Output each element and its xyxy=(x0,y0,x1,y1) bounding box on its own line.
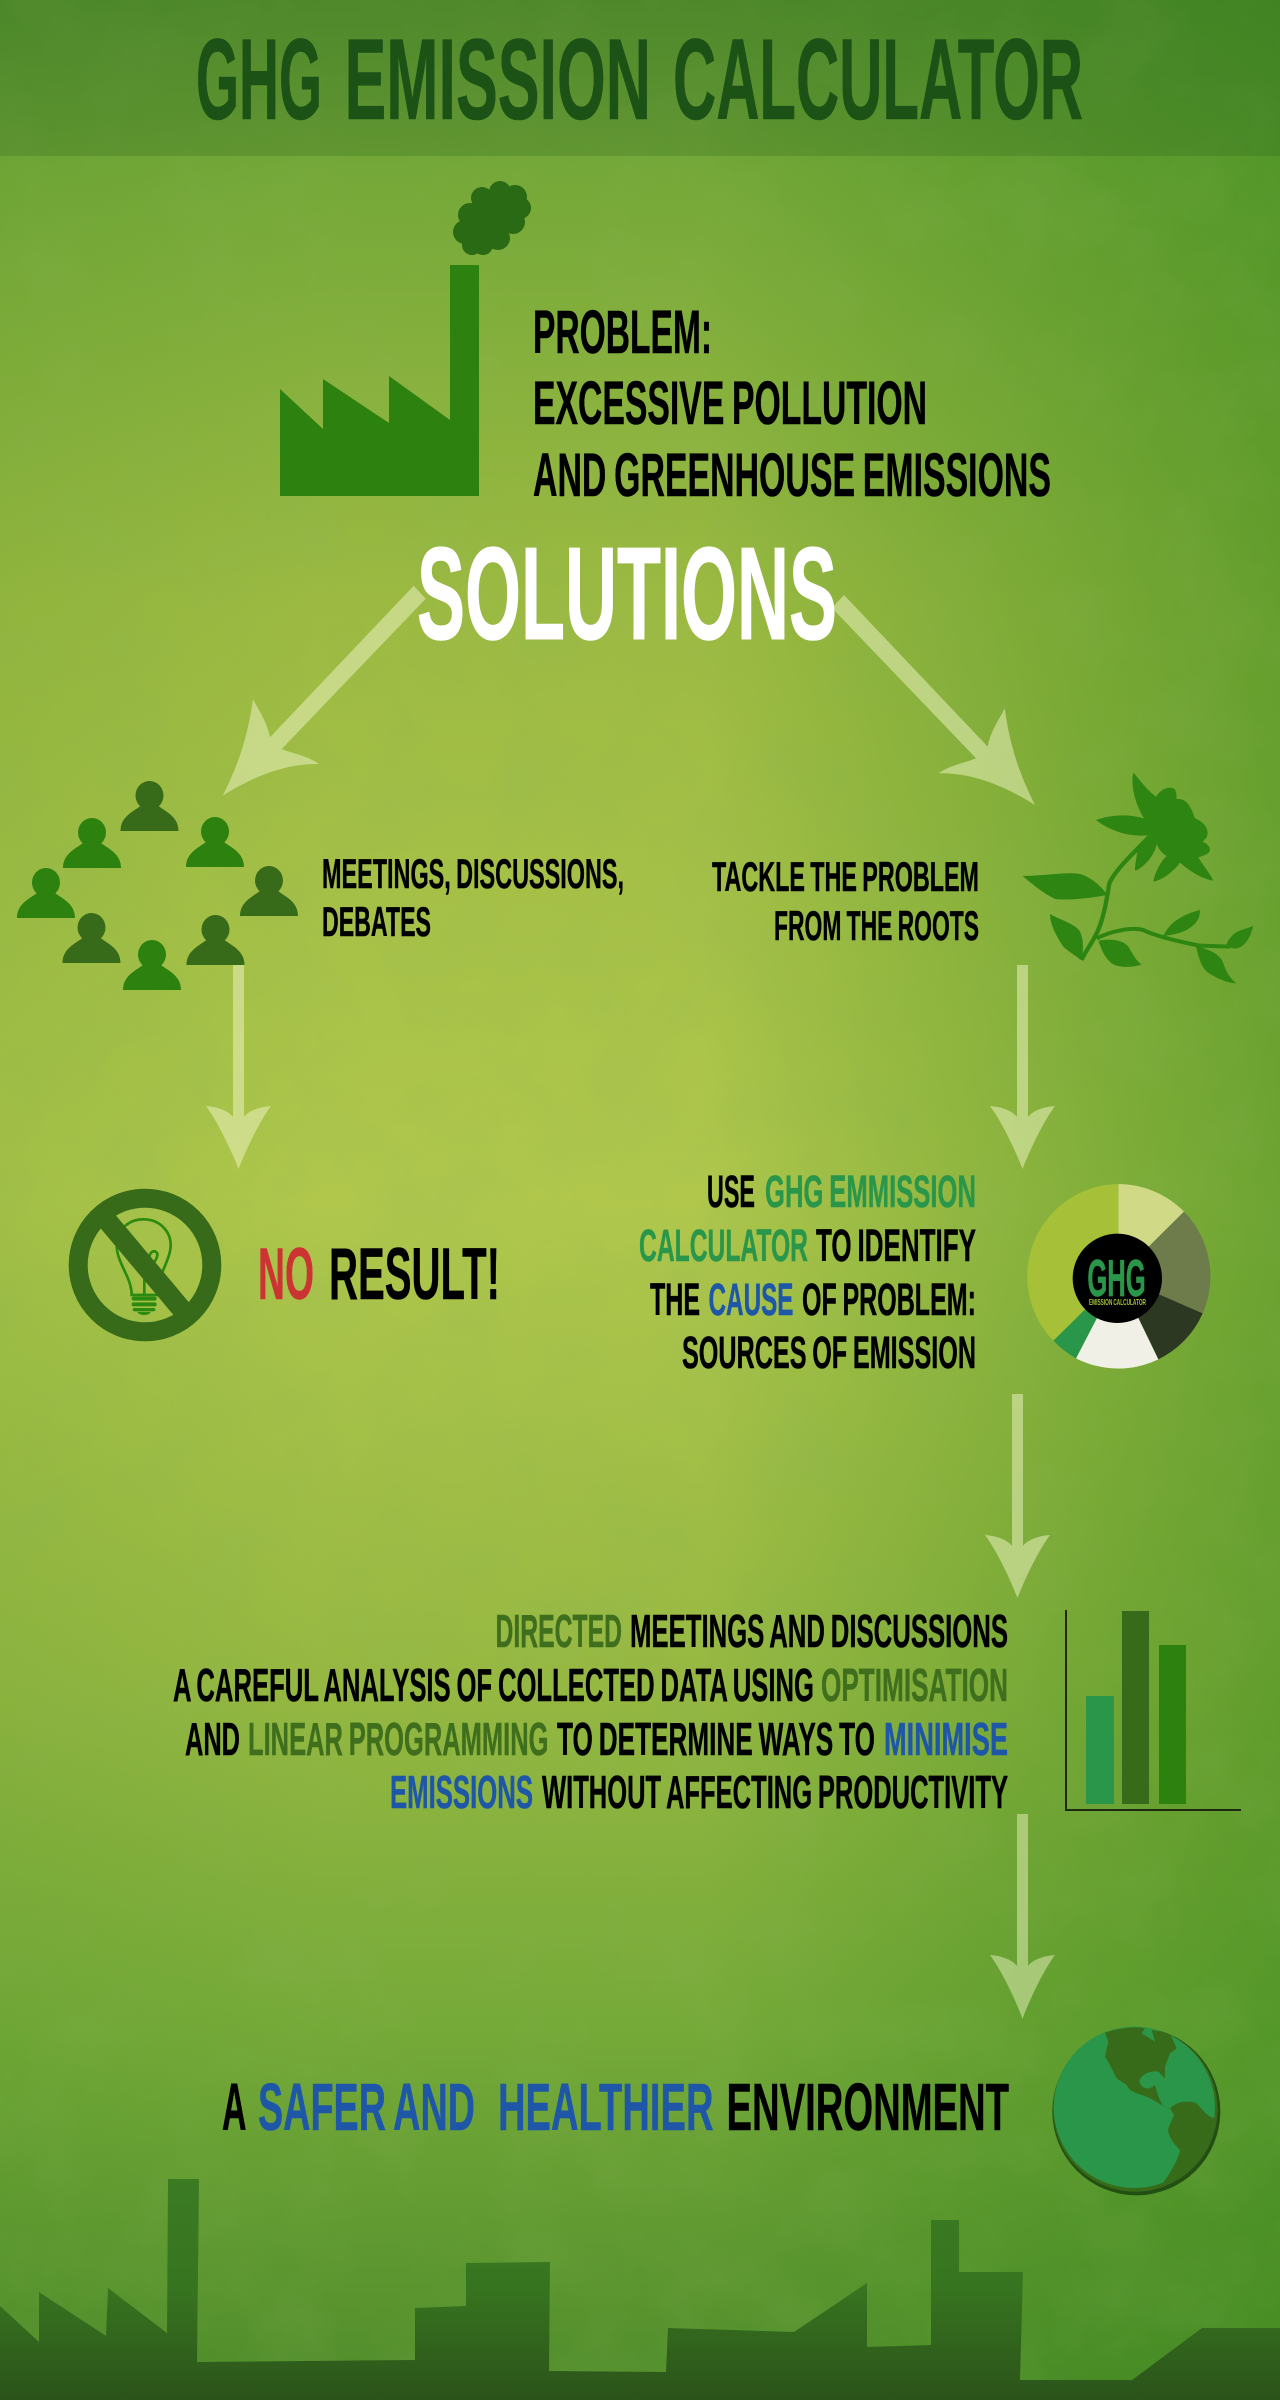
text: safer environment: ENVIRONMENT xyxy=(726,2070,1009,2145)
problem statement xyxy=(533,298,1051,509)
text: directed analysis: OPTIMISATION xyxy=(821,1659,1008,1711)
text: tackle the problem: FROM THE ROOTS xyxy=(774,902,979,949)
solutions heading: SOLUTIONS xyxy=(417,520,837,667)
donut chart: sources of emission: EMISSION CALCULATOR xyxy=(1089,1297,1146,1307)
arrow: calculator to analysis xyxy=(985,1394,1050,1598)
smoke cloud xyxy=(453,181,531,255)
text: safer environment xyxy=(222,2070,1009,2145)
text: no result xyxy=(258,1234,500,1315)
factory skyline silhouette xyxy=(0,2179,1280,2400)
text: meetings: MEETINGS, DISCUSSIONS, xyxy=(322,850,624,897)
bar chart xyxy=(1066,1610,1241,1810)
text: use the calculator: TO IDENTIFY xyxy=(816,1220,976,1271)
bulb outline xyxy=(117,1219,171,1315)
title: EMISSION xyxy=(344,16,651,144)
text: use the calculator: SOURCES OF EMISSION xyxy=(682,1327,976,1378)
arrow: solutions to roots xyxy=(832,595,1035,805)
text: use the calculator xyxy=(639,1166,976,1378)
problem statement: PROBLEM: xyxy=(533,298,712,366)
arrow: solutions to meetings xyxy=(223,586,426,796)
text: directed analysis: MINIMISE xyxy=(884,1713,1008,1765)
factory xyxy=(280,265,479,496)
text: safer environment: SAFER AND xyxy=(258,2070,475,2145)
text: directed analysis: AND xyxy=(185,1713,240,1765)
text: meetings xyxy=(322,850,624,945)
donut chart: sources of emission xyxy=(1027,1184,1210,1369)
arrow: analysis to environment xyxy=(990,1814,1055,2019)
text: use the calculator: THE xyxy=(650,1274,700,1325)
text: safer environment: A xyxy=(222,2070,246,2145)
text: meetings: DEBATES xyxy=(322,898,431,945)
text: tackle the problem: TACKLE THE PROBLEM xyxy=(712,853,979,900)
icon: flower xyxy=(1023,773,1253,983)
text: use the calculator: USE xyxy=(707,1166,755,1217)
header band xyxy=(0,0,1280,156)
prohibition ring xyxy=(78,1198,212,1332)
text: tackle the problem xyxy=(712,853,979,949)
icon: factory with smoke xyxy=(280,181,531,496)
text: use the calculator: CAUSE xyxy=(708,1274,794,1325)
arrow: meetings to no result xyxy=(206,965,271,1169)
text: directed analysis: TO DETERMINE WAYS TO xyxy=(557,1713,875,1765)
text: use the calculator: GHG EMMISSION xyxy=(765,1166,976,1217)
text: safer environment: HEALTHIER xyxy=(498,2070,714,2145)
icon: globe xyxy=(1052,2027,1220,2195)
text: directed analysis: EMISSIONS xyxy=(390,1766,533,1818)
text: use the calculator: CALCULATOR xyxy=(639,1220,808,1271)
problem statement: EXCESSIVE POLLUTION xyxy=(533,369,927,437)
icon: crossed-out light bulb xyxy=(78,1198,212,1332)
text: no result: RESULT! xyxy=(329,1234,500,1315)
title: GHG xyxy=(196,16,322,144)
donut chart: sources of emission: GHG xyxy=(1087,1250,1146,1308)
text: no result: NO xyxy=(258,1234,314,1315)
icon: people in a circle xyxy=(17,781,298,990)
text: directed analysis xyxy=(173,1605,1008,1818)
arrow: roots to calculator xyxy=(990,965,1055,1169)
text: directed analysis: LINEAR PROGRAMMING xyxy=(248,1713,548,1765)
title xyxy=(196,16,1083,144)
text: directed analysis: DIRECTED xyxy=(496,1605,622,1657)
text: use the calculator: OF PROBLEM: xyxy=(802,1274,976,1325)
